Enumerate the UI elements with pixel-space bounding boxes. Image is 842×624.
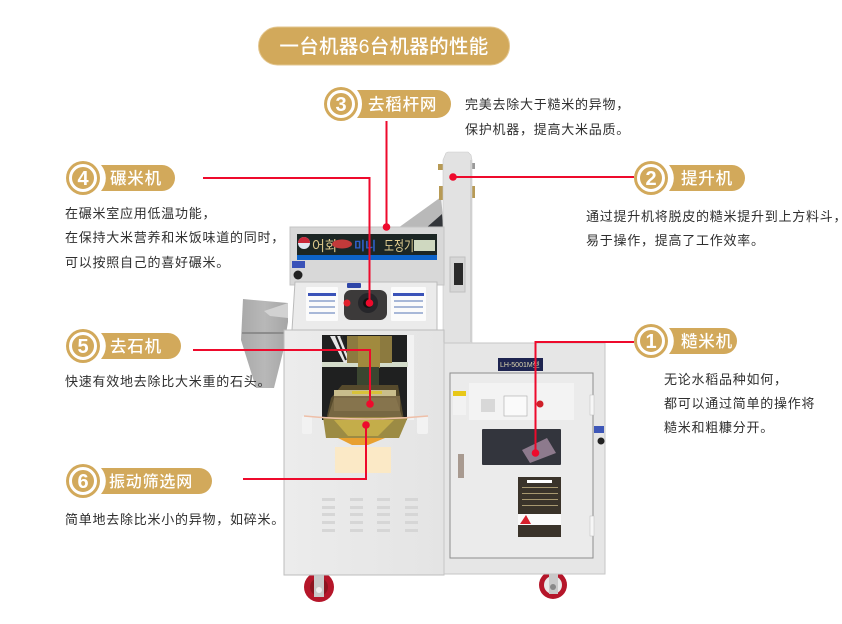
description 1: 都可以通过简单的操作将 [664, 396, 815, 411]
description 1: 糙米和粗糠分开。 [664, 420, 774, 435]
callout 2: elevator [449, 161, 842, 248]
badge 1: 1 [645, 331, 657, 353]
pointer 4 [203, 178, 373, 307]
pointer 6 [243, 421, 370, 479]
callout 6: vibrating screen [65, 421, 370, 527]
description 6: 简单地去除比米小的异物，如碎米。 [65, 512, 285, 527]
description 3: 保护机器，提高大米品质。 [465, 122, 630, 137]
wheels [304, 571, 567, 602]
badge 5 [66, 329, 181, 363]
pointer 3 [383, 121, 390, 231]
badge 1: 糙米机 [681, 332, 733, 351]
badge 6 [66, 464, 212, 498]
chute [398, 197, 444, 228]
description 4: 在保持大米营养和米饭味道的同时， [65, 230, 285, 245]
banner: 미니 [354, 237, 376, 254]
badge 3: 去稻杆网 [368, 95, 437, 114]
description 4: 可以按照自己的喜好碾米。 [65, 255, 230, 270]
badge 4: 4 [77, 168, 89, 190]
pointer 5 [193, 350, 374, 408]
badge 3 [324, 87, 451, 121]
callout 5: destoner [65, 329, 374, 408]
callout 1: huller [532, 324, 815, 457]
tower [438, 152, 475, 345]
description 2: 易于操作，提高了工作效率。 [586, 233, 765, 248]
callout 3: straw screen [324, 87, 630, 231]
control panel [292, 282, 437, 330]
badge 4 [66, 161, 175, 195]
right cabinet [444, 343, 605, 574]
window [322, 335, 414, 420]
badge 6: 振动筛选网 [109, 472, 193, 491]
title: 一台机器6台机器的性能 [279, 36, 489, 58]
knob [292, 261, 305, 280]
title [258, 27, 510, 65]
upper cover [290, 227, 444, 285]
pointer 1 [532, 342, 634, 457]
vibrating tray [302, 416, 428, 473]
description 3: 完美去除大于糙米的异物， [465, 97, 630, 112]
badge 3: 3 [335, 94, 347, 116]
pointer 2 [449, 173, 634, 181]
body [284, 330, 444, 575]
description 4: 在碾米室应用低温功能， [65, 206, 216, 221]
badge 5: 5 [77, 336, 89, 358]
badge 2: 提升机 [681, 169, 733, 188]
callout 4: milling [65, 161, 373, 307]
description 5: 快速有效地去除比大米重的石头。 [65, 374, 271, 389]
right cabinet: LH-5001M型 [500, 360, 540, 369]
description 1: 无论水稻品种如何， [664, 372, 788, 387]
vents [322, 498, 418, 532]
banner: 어화 [312, 236, 338, 256]
hopper [241, 299, 288, 388]
banner: 도정기 [384, 236, 414, 256]
badge 1 [634, 324, 737, 358]
badge 5: 去石机 [110, 337, 162, 356]
machine illustration [241, 152, 605, 602]
description 2: 通过提升机将脱皮的糙米提升到上方料斗， [586, 209, 842, 224]
badge 2 [634, 161, 745, 195]
banner [297, 234, 437, 260]
badge 6: 6 [77, 471, 89, 493]
badge 4: 碾米机 [110, 169, 162, 188]
badge 2: 2 [645, 168, 657, 190]
